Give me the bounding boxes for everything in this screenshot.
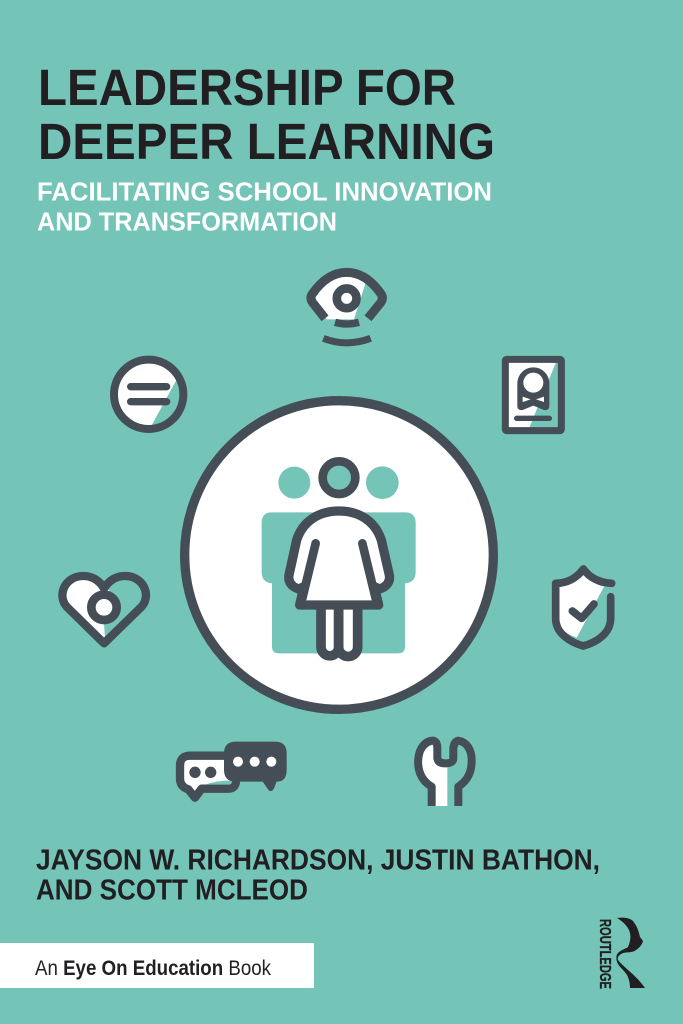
subtitle: FACILITATING SCHOOL INNOVATION [37,178,492,206]
background people [262,466,416,653]
light speech bubble [180,756,236,798]
series banner: An Eye On Education Book [35,956,271,980]
authors: JAYSON W. RICHARDSON, JUSTIN BATHON, [36,844,600,876]
series banner [0,943,314,988]
icon: central people in circle [185,401,493,709]
icon: circle with lines [114,360,190,429]
title [38,59,495,170]
large white circle [185,401,493,709]
subtitle: AND TRANSFORMATION [37,208,337,236]
icon: heart [62,576,146,643]
authors: AND SCOTT MCLEOD [36,874,308,906]
title: LEADERSHIP FOR [38,59,456,116]
icon: certificate [505,359,561,431]
publisher logo: ROUTLEDGE [596,919,613,989]
authors [36,844,600,906]
subtitle [37,178,492,236]
icon: shield [556,569,612,646]
icon: wrench [418,741,472,806]
icon: chat bubbles [180,742,287,798]
dark speech bubble [224,742,287,791]
icon: eye [311,272,382,343]
foreground person [289,461,390,656]
publisher logo [596,918,645,989]
title: DEEPER LEARNING [38,113,495,170]
